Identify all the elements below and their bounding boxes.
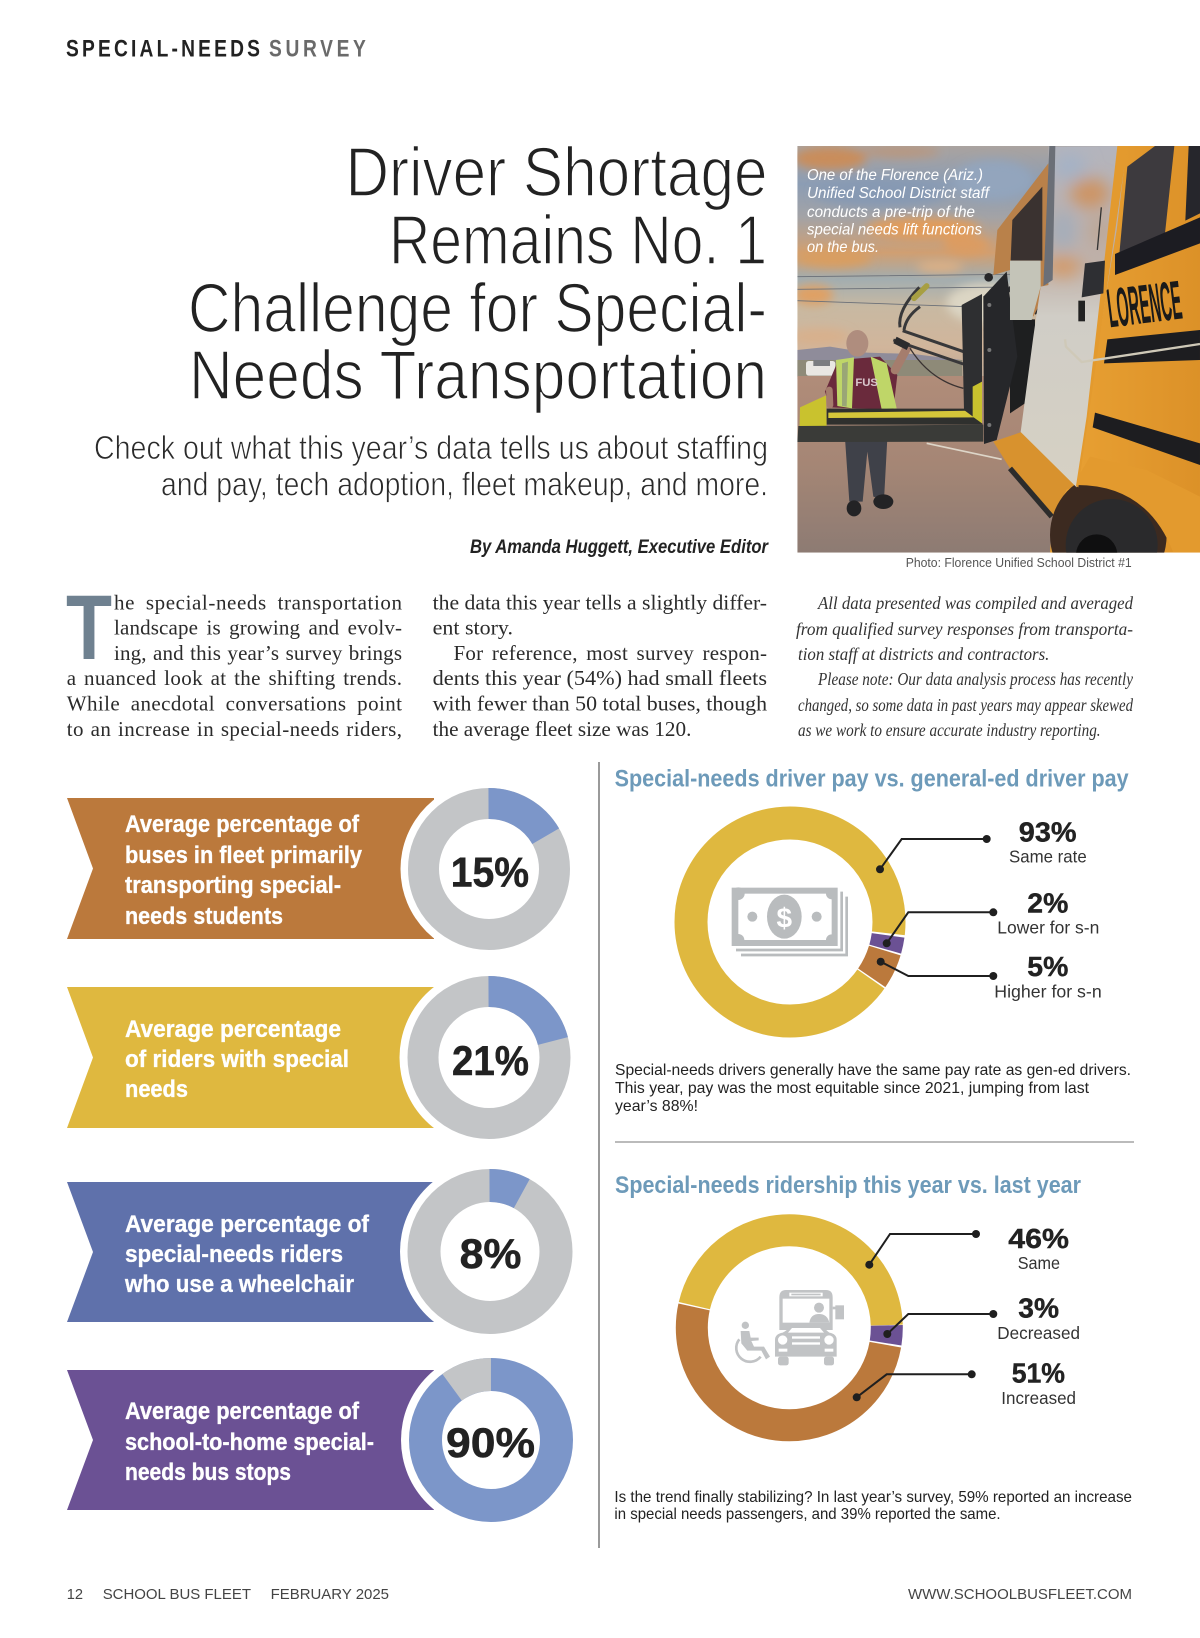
- body text column 1: he special-needs transportation: [114, 590, 402, 614]
- text: driver pay note: year’s 88%!: [615, 1098, 698, 1115]
- body text column 2: the average fleet size was 120.: [433, 717, 691, 741]
- panel: riders stat 21%: of riders with special: [125, 1046, 349, 1073]
- body text column 1: [67, 590, 402, 741]
- panel: wheelchair stat 8%: 8%: [460, 1230, 521, 1277]
- methodology note: Please note: Our data analysis process has recently: [817, 669, 1133, 689]
- icon: stack of money: $: [777, 902, 793, 933]
- methodology note: [796, 593, 1133, 740]
- handle: [892, 286, 963, 366]
- panel: riders stat 21%: [67, 968, 578, 1147]
- subtitle: and pay, tech adoption, fleet makeup, and more.: [161, 466, 768, 503]
- body text column 2: [433, 590, 768, 741]
- methodology note: as we work to ensure accurate industry reporting.: [798, 720, 1101, 740]
- labels: driver pay: Lower for s-n: [997, 917, 1099, 937]
- panel: wheelchair stat 8%: who use a wheelchair: [124, 1271, 354, 1298]
- photo caption: special needs lift functions: [807, 222, 982, 239]
- panel: fleet stat 15%: Average percentage of: [125, 811, 360, 838]
- photo caption: Unified School District staff: [807, 185, 990, 202]
- panel: bus stops stat 90%: needs bus stops: [125, 1459, 291, 1486]
- labels: ridership: 46%: [1008, 1223, 1069, 1254]
- text: ridership note: Is the trend finally stabilizing? In last year’s survey, 59% reported an increase: [614, 1489, 1132, 1506]
- labels: driver pay: [994, 817, 1102, 1001]
- title: Challenge for Special-: [188, 269, 767, 347]
- footer: WWW.SCHOOLBUSFLEET.COM: [908, 1586, 1132, 1603]
- methodology note: All data presented was compiled and averaged: [817, 593, 1133, 613]
- labels: driver pay: Higher for s-n: [994, 981, 1102, 1001]
- panel: fleet stat 15%: [67, 780, 578, 958]
- panel: fleet stat 15%: needs students: [125, 903, 283, 930]
- footer: [67, 1586, 1132, 1603]
- footer: 12: [67, 1586, 83, 1603]
- lift platform: [800, 396, 827, 426]
- methodology note: tion staff at districts and contractors.: [798, 644, 1049, 664]
- body text column 1: While anecdotal conversations point: [67, 692, 402, 716]
- labels: ridership: [997, 1223, 1080, 1408]
- leader lines: driver pay: [876, 835, 997, 980]
- body text column 1: to an increase in special-needs riders,: [67, 717, 402, 741]
- methodology note: from qualified survey responses from transporta-: [796, 619, 1133, 639]
- photo caption: on the bus.: [807, 239, 879, 256]
- text: driver pay note: Special-needs drivers generally have the same pay rate as gen-ed drivers.: [615, 1062, 1131, 1079]
- body text column 2: with fewer than 50 total buses, though: [433, 692, 768, 716]
- section header: SPECIAL-NEEDS: [66, 34, 260, 62]
- labels: driver pay: 5%: [1027, 951, 1068, 982]
- title: Needs Transportation: [189, 336, 767, 414]
- panel: riders stat 21%: 21%: [452, 1037, 529, 1084]
- subtitle: [94, 429, 768, 503]
- labels: driver pay: Same rate: [1009, 847, 1087, 867]
- labels: driver pay: 93%: [1019, 817, 1077, 848]
- labels: ridership: 3%: [1018, 1292, 1059, 1323]
- panel: fleet stat 15%: buses in fleet primarily: [125, 842, 363, 869]
- photo: staff member testing bus wheelchair lift: [797, 146, 1200, 553]
- donut chart: ridership: [692, 1230, 887, 1425]
- footer: SCHOOL BUS FLEET: [103, 1586, 251, 1603]
- section header: [66, 34, 366, 62]
- door: [1021, 146, 1127, 487]
- icon: bus and wheelchair: [736, 1290, 844, 1365]
- panel: fleet stat 15%: 15%: [451, 848, 529, 896]
- panel: fleet stat 15%: transporting special-: [125, 872, 341, 899]
- labels: driver pay: 2%: [1027, 888, 1068, 918]
- text: ridership note: [614, 1489, 1132, 1523]
- body text column 2: dents this year (54%) had small fleets: [433, 666, 767, 690]
- methodology note: changed, so some data in past years may appear skewed: [798, 695, 1133, 715]
- photo credit: Photo: Florence Unified School District #1: [906, 555, 1132, 570]
- donut chart: driver pay: [691, 823, 889, 1021]
- icon: stack of money: [732, 887, 847, 955]
- body text column 2: For reference, most survey respon-: [454, 641, 767, 665]
- bus: [1050, 146, 1200, 553]
- panel: bus stops stat 90%: 90%: [446, 1419, 535, 1466]
- title: Remains No. 1: [389, 201, 767, 279]
- lift column: [962, 294, 982, 423]
- panel: riders stat 21%: Average percentage: [125, 1016, 341, 1043]
- title: [188, 133, 768, 414]
- person: FUS: [855, 377, 878, 389]
- panel: wheelchair stat 8%: special-needs riders: [125, 1241, 343, 1268]
- text: driver pay note: This year, pay was the most equitable since 2021, jumping from last: [615, 1080, 1090, 1097]
- byline: By Amanda Huggett, Executive Editor: [470, 536, 769, 558]
- body text column 1: ing, and this year’s survey brings: [114, 641, 402, 665]
- body text column 2: the data this year tells a slightly differ-: [433, 590, 767, 614]
- labels: ridership: 51%: [1012, 1357, 1065, 1388]
- panel: bus stops stat 90%: [67, 1349, 582, 1531]
- labels: ridership: Decreased: [997, 1323, 1080, 1343]
- panel: wheelchair stat 8%: Average percentage of: [125, 1211, 370, 1238]
- footer: FEBRUARY 2025: [271, 1586, 389, 1603]
- subtitle: Check out what this year’s data tells us about staffing: [94, 429, 768, 466]
- photo caption: [807, 167, 990, 256]
- panel: wheelchair stat 8%: [67, 1162, 580, 1342]
- panel: riders stat 21%: needs: [125, 1076, 188, 1103]
- body text column 1: landscape is growing and evolv-: [114, 615, 402, 639]
- labels: ridership: Same: [1018, 1253, 1060, 1273]
- panel: bus stops stat 90%: Average percentage of: [125, 1398, 360, 1425]
- body text column 2: ent story.: [433, 615, 513, 639]
- person: [825, 330, 907, 516]
- title: Driver Shortage: [346, 133, 768, 211]
- labels: ridership: Increased: [1001, 1388, 1076, 1408]
- heading: driver pay: Special-needs driver pay vs. general-ed driver pay: [615, 766, 1129, 792]
- heading: ridership: Special-needs ridership this year vs. last year: [615, 1172, 1081, 1199]
- text: driver pay note: [615, 1062, 1131, 1115]
- section header: SURVEY: [269, 34, 366, 62]
- text: ridership note: in special needs passengers, and 39% reported the same.: [614, 1506, 1001, 1523]
- leader lines: ridership: [853, 1230, 997, 1401]
- photo caption: conducts a pre-trip of the: [807, 204, 975, 221]
- panel: bus stops stat 90%: school-to-home special-: [125, 1429, 374, 1456]
- drop cap: T: [66, 577, 112, 679]
- photo caption: One of the Florence (Ariz.): [807, 167, 983, 184]
- body text column 1: a nuanced look at the shifting trends.: [67, 666, 402, 690]
